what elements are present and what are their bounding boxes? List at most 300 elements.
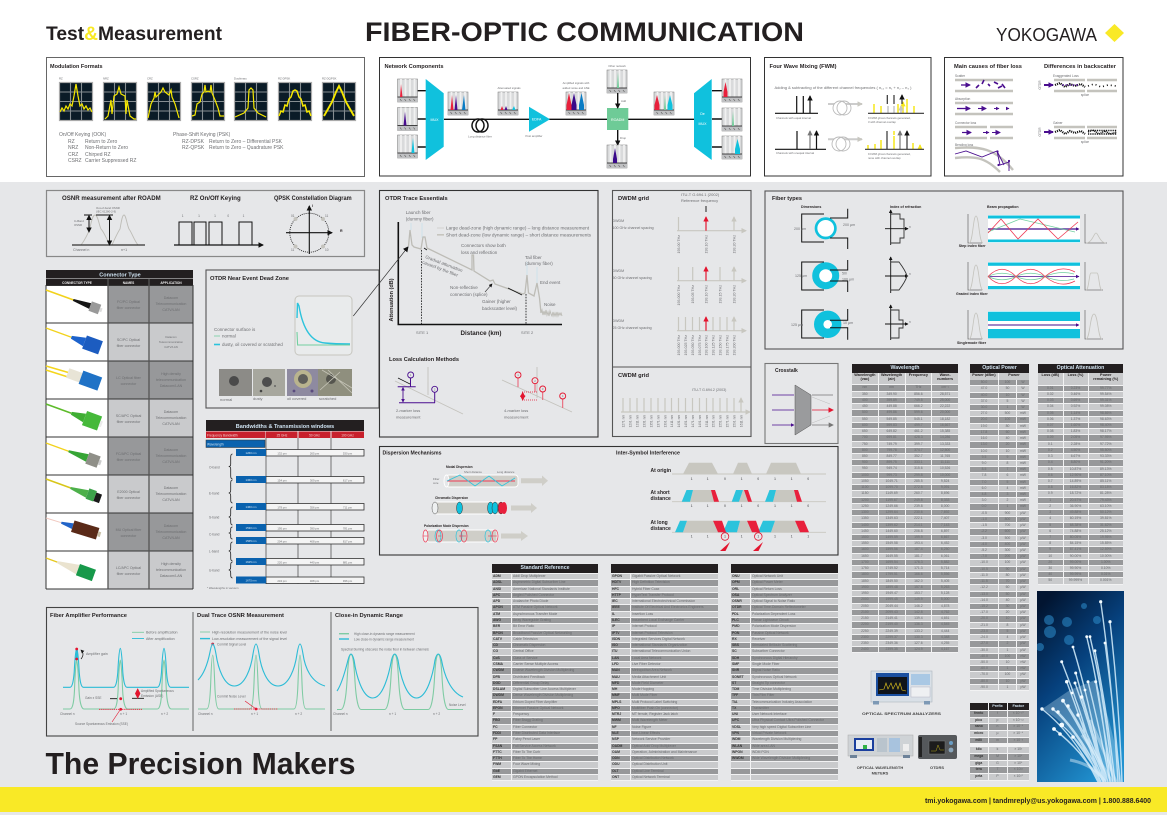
table: optical power: -2.2	[981, 529, 987, 533]
row: SC/PC: Telecommunication	[159, 340, 183, 344]
table: wavelength: 20,000	[940, 410, 950, 414]
table: optical power: 17.8	[981, 430, 987, 434]
logo: Yokogawa: YOKOGAWA	[996, 24, 1098, 45]
table: wavelength: 1899.48	[885, 585, 898, 589]
table: optical attenuation: 0.6	[1048, 473, 1053, 477]
table: wavelength: 352.7	[914, 454, 923, 458]
grid: 50 GHz: 50 GHz channel spacing	[612, 276, 652, 280]
table: standard reference column 2: ISDN	[612, 637, 620, 641]
row: MU	[44, 512, 186, 540]
diagram: gainer: Gainer	[1053, 121, 1064, 125]
table: standard reference column 2: NSP	[612, 737, 619, 741]
table: wavelength: 399.89	[886, 398, 897, 402]
row: SC/PC	[44, 321, 183, 354]
table: optical power: 1	[1007, 666, 1008, 670]
braces and band labels: O-band	[209, 466, 220, 470]
grid: 25 GHz: DWDM	[612, 319, 624, 323]
table: standard reference column 3: Optical Power Meter	[752, 580, 783, 584]
text: launch fiber	[406, 210, 434, 222]
heading: CWDM grid: CWDM grid	[618, 373, 649, 379]
plot: RZ-DQPSK	[322, 76, 356, 120]
row: MU: connector	[121, 534, 137, 538]
plot: Duobinary: Duobinary	[234, 76, 247, 80]
table: standard reference column 3: Passive Optical Network	[752, 631, 789, 635]
table: standard reference column 1: DWDM	[493, 693, 504, 697]
table: standard reference column 1: Frequency	[513, 712, 529, 716]
heading: differences in backscatter: Differences in backscatter	[1044, 64, 1117, 70]
table: optical attenuation: 0.05	[1047, 411, 1054, 415]
text block: phase-shift keying: Return to Zero – Quadrature PSK	[209, 145, 284, 151]
table: SI prefixes: µ	[997, 731, 998, 735]
table: standard reference column 1: Four Wave Mixing	[513, 762, 540, 766]
table: wavelength: 2199.40	[885, 622, 898, 626]
grid: CWDM	[621, 398, 750, 427]
row: SC/PC: CATV/LAN	[164, 345, 178, 349]
row: LC: LC Optical fiber	[116, 376, 142, 380]
product: optical spectrum analyzer: OPTICAL SPECTRUM ANALYZERS	[862, 712, 942, 716]
table: standard reference column 2: Optical Distribution Unit	[632, 762, 667, 766]
plot: RZ: RZ	[59, 76, 63, 80]
diagram: bending loss	[955, 143, 1013, 172]
table: standard reference column 3: SBS	[732, 643, 739, 647]
table: wavelength: 2149.41	[885, 616, 898, 620]
spectrum: attenuated signals	[497, 86, 521, 115]
table: wavelength: 2349.36	[885, 641, 898, 645]
table: optical attenuation: 6.67%	[1071, 454, 1080, 458]
table: wavelength: 1199.67	[886, 498, 898, 502]
row: FC/APC: fiber connector	[117, 458, 141, 462]
table: optical power: µW	[1020, 579, 1026, 583]
table: standard reference column 2: Optical Line Terminal	[632, 769, 664, 773]
table: optical power: µW	[1020, 629, 1026, 633]
diagram: chromatic dispersion: Chromatic Dispersion	[435, 496, 468, 500]
table: wavelength: 11,765	[940, 454, 950, 458]
legend: dead zones: Short dead-zone (low dynamic range) – short distance measurements	[446, 232, 592, 238]
grid: 25 GHz: 193.075 THz	[698, 335, 702, 356]
table: wavelength: 260.7	[914, 491, 923, 495]
table: standard reference column 1: CSMA	[493, 662, 503, 666]
table: optical attenuation: 4	[1049, 516, 1051, 520]
legend: connector surface: Connector surface is	[214, 327, 256, 332]
table: optical power: mW	[1020, 455, 1026, 459]
table: wavelength: 130.3	[914, 635, 923, 639]
table: wavelength: 157.8	[914, 585, 923, 589]
grid: CWDM: 1491 nm	[698, 415, 702, 427]
table: optical power: 50.0	[981, 380, 987, 384]
spectrum: after ROADM	[654, 92, 674, 115]
table: wavelength: 1550	[861, 541, 869, 545]
table: optical attenuation: 90.00%	[1070, 554, 1081, 558]
table: standard reference column 2: OLT	[612, 769, 619, 773]
table: wavelength: (air)	[888, 377, 895, 381]
table: optical power: 16.0	[981, 436, 987, 440]
grid: 25 GHz: 193.050 THz	[691, 335, 695, 356]
arrow: drop	[618, 130, 627, 145]
table: wavelength: 2350	[861, 641, 869, 645]
table: standard reference column 3: ORL	[732, 587, 739, 591]
table: optical power: 1	[1007, 405, 1008, 409]
chart: ISI at long distance	[650, 520, 826, 551]
table: standard reference column 1: FP	[493, 737, 497, 741]
table: wavelength: 799.78	[886, 448, 897, 452]
table: standard reference column 3: UNI	[732, 712, 738, 716]
table: SI prefixes: pico	[975, 718, 982, 722]
table: wavelength: 166.6	[914, 572, 923, 576]
dimensions: singlemode: 10 µm	[843, 321, 853, 325]
table: standard reference column 1: FTTC	[493, 750, 502, 754]
row: 1460 nm: 356 pm	[310, 506, 320, 510]
table: standard reference column 1: ADM	[493, 574, 501, 578]
row: 1460 nm: 711 pm	[343, 506, 353, 510]
table: standard reference column 2: Media Attachment Unit	[632, 674, 666, 678]
table: optical attenuation: 2	[1049, 504, 1051, 508]
table: optical attenuation: 0.23%	[1071, 386, 1080, 390]
table: wavelength: 5,882	[941, 560, 949, 564]
table: optical attenuation: 99.00%	[1070, 560, 1081, 564]
text block: on/off keying: NRZ	[68, 145, 78, 151]
table: wavelength: 6,897	[941, 529, 949, 533]
table: wavelength: 749.5	[914, 398, 923, 402]
heading: OTDR trace essentials: OTDR Trace Essentials	[385, 196, 448, 202]
panel: fiber loss and backscatter	[944, 58, 1123, 176]
table: optical power: µW	[1020, 648, 1026, 652]
table: standard reference column 2: NF	[612, 725, 617, 729]
text block: phase-shift keying: Phase-Shift Keying (PSK)	[173, 132, 231, 138]
table: standard reference column 1: APC	[493, 593, 500, 597]
table: wavelength: Wavelength	[854, 373, 875, 377]
chart: ISI at long distance: 1	[774, 534, 776, 538]
table: wavelength: 146.2	[914, 604, 923, 608]
site labels	[416, 330, 534, 335]
table: optical attenuation: 98.17%	[1100, 429, 1112, 433]
table: optical power: 5	[1007, 629, 1008, 633]
callout lines	[411, 223, 537, 283]
table: standard reference column 1: DSLAM	[493, 687, 505, 691]
table: wavelength: 1799.51	[885, 572, 898, 576]
braces and band labels: E-band	[209, 492, 220, 496]
table: wavelength: 149.9	[914, 597, 923, 601]
table: optical attenuation: 0.9	[1048, 491, 1053, 495]
table: optical attenuation: 0.3	[1048, 454, 1053, 458]
spectrum: input cyan	[398, 135, 418, 158]
row: 1625 nm	[236, 558, 364, 565]
table: standard reference column 3: Wide area LAN	[752, 744, 775, 748]
grid: 25 GHz: 25 GHz channel spacing	[612, 326, 652, 330]
table: standard reference column 1: EPON	[493, 706, 503, 710]
chart: ISI at short distance: At short	[650, 490, 670, 496]
table: standard reference column 1: AWG	[493, 618, 501, 622]
table: standard reference column 3: PON	[732, 631, 739, 635]
plot: RZ-DPSK: RZ-DPSK	[278, 76, 290, 80]
product: optical spectrum analyzer	[862, 671, 942, 716]
plot: NRZ: NRZ	[103, 76, 109, 80]
table: wavelength: 4,878	[941, 604, 949, 608]
table: optical power: 300	[1005, 548, 1010, 552]
table: optical attenuation: Power	[1100, 373, 1111, 377]
grid: CWDM: 1451 nm	[684, 415, 688, 427]
chart: close-in dynamic range	[333, 654, 466, 716]
fiber link lines	[417, 91, 722, 147]
chart: RZ on/off keying: 0	[227, 214, 229, 218]
chart: equal interval output: 3 with channel overlap	[868, 120, 896, 124]
chart: ISI at long distance: distance	[650, 526, 671, 532]
row: SC/APC: SC/APC Optical	[116, 414, 141, 418]
dimensions: graded index	[795, 260, 854, 292]
table: optical power: 7	[1007, 467, 1008, 471]
table: optical power: -90.0	[980, 685, 988, 689]
chart: unequal interval output	[865, 131, 924, 160]
table: wavelength: 5,405	[941, 579, 949, 583]
table: standard reference column 1: Erbium Doped Fiber Amplifier	[513, 700, 557, 704]
row: 1565 nm	[236, 537, 364, 544]
table: optical power: 100	[1005, 654, 1010, 658]
heading: network components: Network Components	[384, 64, 444, 70]
table: optical attenuation: 50	[1048, 578, 1052, 582]
table: optical power: µW	[1020, 604, 1026, 608]
table: wavelength: 1800	[861, 572, 869, 576]
table: wavelength: 400	[862, 398, 868, 402]
table: wavelength: 193.4	[914, 541, 923, 545]
table: standard reference column 3: Synchronous Optical Network	[752, 674, 797, 678]
table: standard reference column 2: Internet Protocol Television	[632, 631, 673, 635]
table: SI prefixes	[970, 703, 1029, 781]
table: optical attenuation: 0.10%	[1101, 566, 1111, 570]
table: optical attenuation: 0.5	[1048, 467, 1053, 471]
table: standard reference column 2: LAN	[612, 656, 619, 660]
table: optical power: -27.0	[980, 641, 988, 645]
table: standard reference column 2	[611, 564, 718, 781]
table: optical power: -12.2	[980, 585, 988, 589]
diagram: modal dispersion: core	[433, 481, 439, 485]
table: SI prefixes: × 10⁹	[1014, 761, 1022, 765]
chart: amplifier performance: Gain x SSE	[85, 696, 101, 700]
table: wavelength: 176.3	[914, 560, 923, 564]
table: standard reference column 1: Array Waveguide Grating	[513, 618, 551, 622]
table: wavelength: 1549.58	[885, 541, 898, 545]
table: optical attenuation: 83.18%	[1100, 485, 1112, 489]
table: optical attenuation: 36.90%	[1070, 504, 1081, 508]
table: optical power: -21.0	[980, 623, 988, 627]
table: standard reference column 3: Ultra Physical Contact Ultra Polished Connector	[752, 718, 824, 722]
table: wavelength: 1250	[861, 504, 869, 508]
text block: on/off keying: Carrier Suppressed RZ	[85, 158, 136, 164]
grid: 25 GHz: 193.175 THz	[726, 335, 730, 356]
table: standard reference column 2: Internet Protocol	[632, 624, 657, 628]
table: optical attenuation: 0.001%	[1100, 578, 1112, 582]
table: optical attenuation: 20	[1048, 560, 1052, 564]
table: standard reference column 1: Fiber To The Home	[513, 756, 542, 760]
row: LC: High density	[161, 372, 181, 376]
row: 1260 nm: 1260 nm	[246, 451, 257, 455]
table: wavelength: 1200	[861, 498, 869, 502]
table: SI prefixes: G	[996, 761, 999, 765]
table: connector type: Connector Type	[99, 272, 141, 278]
text block: phase-shift keying: RZ-DPSK	[182, 139, 205, 145]
heading: inter-symbol interference: Inter-Symbol Interference	[616, 450, 680, 456]
amplifier: EDFA: Post amplifier	[526, 134, 543, 138]
table: optical power: 40	[1006, 598, 1009, 602]
table: optical attenuation: 91.20%	[1100, 460, 1112, 464]
chart: RZ on/off keying: 1	[214, 214, 216, 218]
table: standard reference column 2: Multi Mode Fiber	[632, 693, 657, 697]
grid: 50 GHz: 193.20 THz	[732, 285, 736, 304]
spectrum: other network	[607, 64, 627, 93]
table: optical power: 30	[1006, 604, 1009, 608]
table: SI prefixes: T	[996, 767, 999, 771]
table: standard reference column 3: WDM PON	[752, 750, 769, 754]
table: wavelength: 142.8	[914, 610, 923, 614]
table: optical attenuation: 12.90%	[1070, 473, 1081, 477]
text: gradual attenuation	[422, 254, 464, 279]
chart: close-in dynamic range: n + 2	[433, 712, 440, 716]
table: optical power: nW	[1020, 666, 1026, 670]
grid: 25 GHz: 193.125 THz	[712, 335, 716, 356]
table: wavelength: 199.9	[914, 535, 923, 539]
table: wavelength: 428.3	[914, 435, 923, 439]
table: SI prefixes: × 10⁻⁶	[1013, 731, 1023, 735]
diagram: exaggerated loss: OTDR	[1038, 80, 1042, 90]
index profile: step: n	[909, 225, 911, 229]
table: SI prefixes: P	[996, 774, 999, 778]
chart: QPSK constellation	[286, 204, 343, 254]
table: wavelength: 1949.47	[885, 591, 898, 595]
table: standard reference column 2: Institute Of Electrical And Electronics Engineers	[632, 605, 704, 609]
table: SI prefixes: m	[996, 738, 999, 742]
table: standard reference column 1: Coarse Wavelength Division Multiplexing	[513, 668, 574, 672]
table: standard reference column 1: Carrier Sense Multiple Access	[513, 662, 558, 666]
table: standard reference column 2: OADM	[612, 744, 622, 748]
table: optical power: 13.0	[981, 442, 987, 446]
table: wavelength: numbers	[937, 377, 953, 381]
table: wavelength: 600	[862, 423, 868, 427]
column heads: Beam propagation	[987, 205, 1019, 209]
table: optical attenuation: 0.07	[1047, 423, 1054, 427]
table: wavelength: 1449.60	[885, 529, 898, 533]
grid: CWDM: 1331 nm	[642, 415, 646, 427]
row: FC/PC: fiber connector	[117, 306, 141, 310]
dimensions: step index	[794, 209, 855, 249]
note: ITU-T G.694.2: ITU-T G.694.2 (2003)	[692, 388, 726, 392]
chart: amplifier performance: Source Spontaneous Emission (SSE)	[75, 722, 128, 726]
table: standard reference column 1: BER	[493, 624, 500, 628]
table: standard reference column 2: Multi Protocol Label Switching	[632, 700, 677, 704]
chart: ISI at short distance: 1	[707, 504, 709, 508]
page background top band	[0, 0, 1167, 182]
table: standard reference column 2: MAN	[612, 668, 620, 672]
dimensions: step index: 200 µm	[843, 223, 855, 227]
table: optical power: 9.0	[982, 461, 986, 465]
row: 1625 nm: 1625 nm	[246, 560, 257, 564]
legend: dual trace: High-resolution measurement of the noise level	[212, 630, 287, 634]
table: optical power: -20.0	[980, 616, 988, 620]
table: optical power: 900	[1005, 511, 1010, 515]
table: wavelength: nm	[863, 385, 867, 389]
table: optical attenuation: 0.4	[1048, 460, 1053, 464]
table: standard reference column 3: Virtual Private Network	[752, 731, 786, 735]
chart: amplifier performance: Emission (ASE)	[141, 694, 163, 698]
table: optical attenuation: Loss (dB)	[1041, 373, 1059, 377]
table: standard reference column 2: Incumbent Local Exchange Carrier	[632, 618, 684, 622]
row: 1530 nm: 390 pm	[310, 526, 320, 530]
table: standard reference column 1	[492, 564, 598, 781]
table: wavelength: 214.1	[914, 523, 923, 527]
table: standard reference column 3: SDH	[732, 656, 739, 660]
chart: equal interval output	[868, 95, 924, 124]
table: optical power: -70.0	[980, 672, 988, 676]
spectrum: attenuated signals: Attenuated signals	[497, 86, 521, 90]
table: standard reference column 3: SMF	[732, 662, 739, 666]
table: standard reference column 3: Telecommunication Industry Association	[752, 700, 812, 704]
table: standard reference column 3: PDL	[732, 612, 739, 616]
table: wavelength: 171.3	[914, 566, 923, 570]
table: bandwidths and transmission windows: Bandwidths & Transmission windows	[236, 424, 334, 430]
table: SI prefixes: M	[996, 754, 999, 758]
text block: on/off keying: Non-Return to Zero	[85, 145, 128, 151]
table: optical power: 600	[1005, 529, 1010, 533]
table: standard reference column 3: SONET	[732, 674, 744, 678]
table: wavelength: 374.7	[914, 448, 923, 452]
table: wavelength: 349.90	[886, 392, 897, 396]
legend: close-in: Low close-in dynamic range measurement	[354, 638, 414, 642]
table: wavelength: 5,000	[941, 597, 949, 601]
amplifier: EDFA	[526, 107, 550, 138]
node: ROADM	[607, 108, 628, 130]
table: optical attenuation: 8	[1049, 541, 1051, 545]
table: wavelength: 9,524	[941, 479, 949, 483]
braces and band labels	[209, 454, 232, 578]
row: MU: MU Optical fiber	[116, 528, 142, 532]
table: wavelength: 6,452	[941, 541, 949, 545]
table: wavelength: 181.7	[914, 554, 923, 558]
table: SI prefixes: × 10⁻⁹	[1013, 724, 1023, 728]
table: standard reference column 1: Fiber Bragg Grating	[513, 718, 543, 722]
table: wavelength: 749.79	[886, 442, 897, 446]
table: optical attenuation: 4.50%	[1071, 448, 1080, 452]
table: optical power: -10.0	[980, 560, 988, 564]
table: wavelength: 950	[862, 466, 868, 470]
dimensions: step index: 200 µm	[794, 227, 806, 231]
row: 1675 nm: 468 pm	[310, 579, 320, 583]
table: optical attenuation: 10.00%	[1100, 554, 1112, 558]
table: wavelength: 7,143	[941, 523, 949, 527]
table: optical attenuation: 63.10%	[1100, 504, 1112, 508]
table: wavelength: 4,255	[941, 641, 949, 645]
table: standard reference column 3: Time Division Multiplexing	[752, 687, 791, 691]
table: wavelength: 15,385	[940, 429, 950, 433]
multiplexer: MUX	[430, 118, 439, 122]
table: optical power: -17.0	[980, 610, 988, 614]
chart: ISI at origin: 0	[807, 477, 809, 481]
row: LC/APC: LC/APC Optical	[116, 566, 141, 570]
table: SI prefixes: femto	[974, 711, 983, 715]
table: wavelength: 999.73	[886, 473, 897, 477]
table: standard reference column 3: Optical Spectrum Analyzer	[752, 593, 792, 597]
row: 1565 nm: 1565 nm	[246, 539, 257, 543]
table: wavelength: 1400	[861, 523, 869, 527]
product: optical wavelength meter: OPTICAL WAVELENGTH	[857, 765, 903, 770]
table: optical power: 4	[1007, 635, 1008, 639]
table: standard reference column 3: Optical Signal to Noise Ratio	[752, 599, 795, 603]
row: 1460 nm	[236, 503, 364, 510]
table: optical power: 1	[1007, 504, 1008, 508]
table: optical power: 47.0	[981, 386, 987, 390]
product: optical wavelength meter: METERS	[872, 770, 889, 776]
table: wavelength: 136.3	[914, 622, 923, 626]
table: wavelength: 6,667	[941, 535, 949, 539]
heading: four wave mixing: Four Wave Mixing (FWM)	[770, 64, 837, 70]
row: 1360 nm: 617 pm	[343, 478, 353, 482]
table: standard reference column 2: Multi Wavelength Meter	[632, 718, 668, 722]
